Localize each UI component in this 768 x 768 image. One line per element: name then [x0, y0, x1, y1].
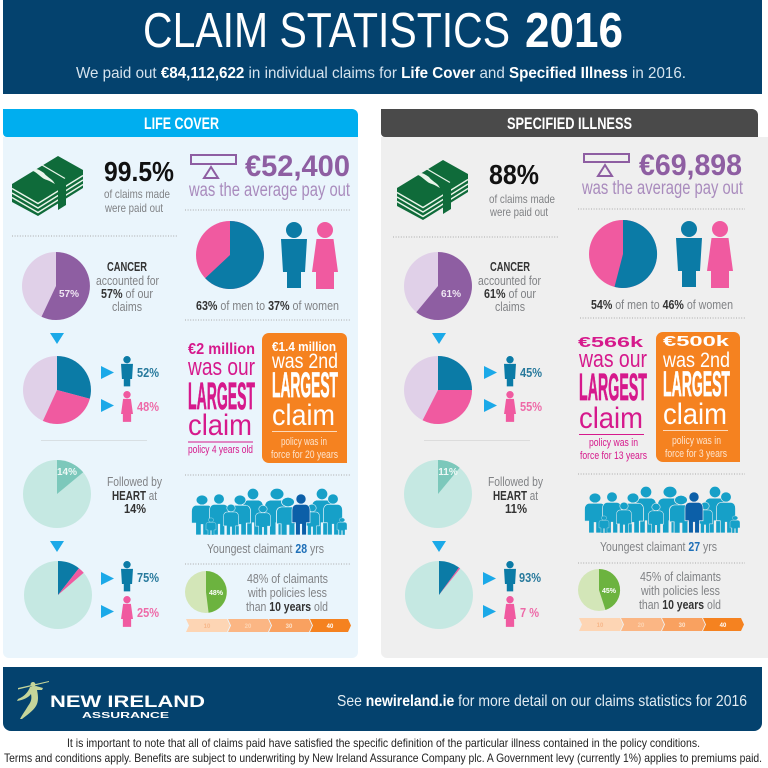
specified illness heading bar — [381, 109, 758, 137]
female percentage: 7 % — [520, 605, 539, 620]
life cover heading: LIFE COVER — [144, 114, 219, 133]
male percentage: 52% — [137, 365, 159, 380]
paid out caption: were paid out — [489, 205, 549, 219]
policies text: than 10 years old — [639, 597, 721, 612]
pie: policies under 10 years — [578, 569, 620, 611]
second largest claim block — [656, 332, 740, 462]
second largest claim block: was 2nd — [662, 349, 730, 372]
policy age arrow bar: 10 — [204, 624, 211, 630]
heart text: Followed by — [107, 474, 162, 489]
largest claim block: policy 4 years old — [188, 444, 253, 456]
male percentage: 45% — [520, 365, 542, 380]
largest claim block: claim — [579, 402, 643, 435]
policies text — [246, 571, 328, 614]
largest claim block: force for 13 years — [580, 450, 647, 462]
paid out caption — [104, 187, 170, 215]
heart text — [107, 474, 162, 516]
second largest claim block — [262, 333, 347, 463]
cancer text: CANCER — [490, 259, 530, 274]
icon: man — [281, 222, 307, 288]
gender caption: 63% of men to 37% of women — [196, 298, 339, 313]
policy age arrow bar — [579, 618, 744, 631]
subtitle: We paid out €84,112,622 in individual claims for Life Cover and Specified Illness in 2016. — [76, 65, 686, 82]
arrow: down — [50, 333, 64, 344]
icon: woman small — [121, 596, 133, 627]
pie: heart 11%: 11% — [438, 467, 458, 478]
second largest claim block: policy was in — [672, 435, 721, 447]
pie: policies under 10 years: 48% — [209, 590, 224, 597]
largest claim block — [578, 334, 647, 462]
policy age arrow bar: 30 — [286, 624, 293, 630]
second largest claim block: force for 3 years — [665, 448, 727, 460]
heart text: 11% — [505, 501, 527, 516]
cancer text — [96, 259, 160, 314]
pie: cancer 57%: 57% — [59, 289, 79, 300]
icon: woman small — [504, 391, 516, 422]
icon: woman small — [504, 596, 516, 627]
second largest claim block: claim — [272, 399, 335, 432]
icon: man small — [504, 561, 516, 591]
cancer text: accounted for — [478, 273, 542, 288]
largest claim block: claim — [188, 409, 252, 442]
second largest claim block: claim — [663, 398, 727, 431]
header banner — [3, 0, 762, 94]
policy age arrow bar — [186, 619, 351, 632]
heart text: HEART at — [112, 488, 157, 503]
largest claim block — [187, 341, 255, 456]
pie: cancer 61%: 61% — [441, 289, 461, 300]
youngest claimant: Youngest claimant 28 yrs — [207, 541, 324, 556]
largest claim block: €2 million — [188, 341, 255, 358]
paid out caption: were paid out — [104, 201, 164, 215]
icon: woman — [312, 222, 338, 289]
cancer text: CANCER — [107, 259, 147, 274]
panel: life cover: LARGEST — [188, 376, 255, 418]
largest claim block: policy was in — [589, 437, 638, 449]
pie: heart by gender — [405, 561, 473, 629]
icon: woman — [707, 221, 733, 288]
logo wordmark: NEW IRELAND — [50, 693, 205, 711]
icon: money stack — [397, 160, 468, 220]
arrows to gender — [101, 572, 114, 618]
cancer text: accounted for — [96, 273, 160, 288]
policies text: 45% of claimants — [640, 569, 721, 584]
policy age arrow bar: 10 — [597, 623, 604, 629]
icon: money stack — [12, 156, 83, 216]
panel: specified illness: LARGEST — [579, 367, 647, 409]
icon: man — [676, 221, 702, 287]
policy age arrow bar: 40 — [720, 623, 727, 629]
largest claim block: was our — [578, 346, 647, 373]
panel: specified illness — [381, 109, 768, 658]
panel: life cover: LARGEST — [272, 366, 338, 405]
pie: heart 14% — [23, 460, 91, 528]
policies text — [639, 569, 721, 612]
policies text: with policies less — [640, 583, 720, 598]
pie: gender split — [196, 221, 264, 289]
specified illness heading: SPECIFIED ILLNESS — [507, 114, 632, 133]
policy age arrow bar: 20 — [245, 624, 252, 630]
arrow: down — [432, 541, 446, 552]
footer banner — [3, 667, 762, 731]
largest claim block: was our — [187, 354, 255, 381]
paid out stat: 99.5% — [104, 156, 174, 187]
disclaimer text — [4, 736, 762, 765]
icon: javelin thrower logo — [17, 681, 49, 719]
policies text: with policies less — [247, 585, 327, 600]
icon: balance scale — [191, 155, 236, 178]
pie: policies under 10 years: 45% — [602, 588, 617, 595]
pie: cancer 57% — [22, 252, 90, 320]
policies text: 48% of claimants — [247, 571, 328, 586]
pie: cancer by gender — [23, 356, 91, 424]
female percentage: 55% — [520, 399, 542, 414]
paid out stat: 88% — [489, 159, 539, 190]
average pay out caption: was the average pay out — [188, 180, 351, 201]
female percentage: 25% — [137, 605, 159, 620]
pie: heart by gender — [24, 561, 92, 629]
title: CLAIM STATISTICS — [143, 4, 510, 58]
largest claim block: €566k — [578, 334, 644, 351]
icon: man small — [121, 561, 133, 591]
arrow: down — [432, 333, 446, 344]
pie: gender split — [589, 220, 657, 288]
icon: man small — [121, 356, 133, 386]
gender caption: 54% of men to 46% of women — [591, 297, 733, 312]
heart text: 14% — [124, 501, 146, 516]
pie: cancer by gender — [404, 356, 472, 424]
average pay out value: €69,898 — [639, 149, 742, 182]
cancer text: 61% of our — [484, 286, 537, 301]
policies text: than 10 years old — [246, 599, 328, 614]
icon: man small — [504, 356, 516, 386]
life cover heading bar — [3, 109, 358, 137]
cancer text — [478, 259, 542, 314]
icon: woman small — [121, 391, 133, 422]
arrows to gender — [483, 572, 496, 618]
logo tagline: ASSURANCE — [82, 711, 170, 720]
youngest claimant: Youngest claimant 27 yrs — [600, 539, 717, 554]
icon: crowd of people — [584, 486, 740, 533]
second largest claim block: policy was in — [281, 436, 327, 448]
male percentage: 93% — [519, 570, 541, 585]
second largest claim block: €500k — [663, 333, 730, 350]
pie: heart 14%: 14% — [57, 467, 77, 478]
heart text: HEART at — [493, 488, 538, 503]
cancer text: 57% of our — [101, 286, 154, 301]
icon: crowd of people — [192, 488, 347, 535]
second largest claim block: force for 20 years — [271, 449, 338, 461]
male percentage: 75% — [137, 570, 159, 585]
panel: life cover — [3, 109, 358, 658]
arrows to gender — [101, 366, 114, 412]
arrow: down — [50, 541, 64, 552]
female percentage: 48% — [137, 399, 159, 414]
heart text: Followed by — [488, 474, 543, 489]
policy age arrow bar: 30 — [679, 623, 686, 629]
pie: heart 11% — [404, 460, 472, 528]
second largest claim block: was 2nd — [271, 350, 338, 373]
paid out caption: of claims made — [489, 192, 555, 206]
paid out caption: of claims made — [104, 187, 170, 201]
pie: cancer 61% — [404, 252, 472, 320]
cancer text: claims — [112, 299, 142, 314]
title year: 2016 — [525, 4, 623, 58]
second largest claim block: €1.4 million — [272, 339, 336, 354]
pie: policies under 10 years — [185, 571, 227, 613]
average pay out value: €52,400 — [245, 150, 350, 183]
arrows to gender — [484, 366, 497, 412]
heart text — [488, 474, 543, 516]
icon: balance scale — [584, 154, 629, 176]
paid out caption — [489, 192, 555, 219]
policy age arrow bar: 20 — [638, 623, 645, 629]
cancer text: claims — [495, 299, 525, 314]
policy age arrow bar: 40 — [327, 624, 334, 630]
